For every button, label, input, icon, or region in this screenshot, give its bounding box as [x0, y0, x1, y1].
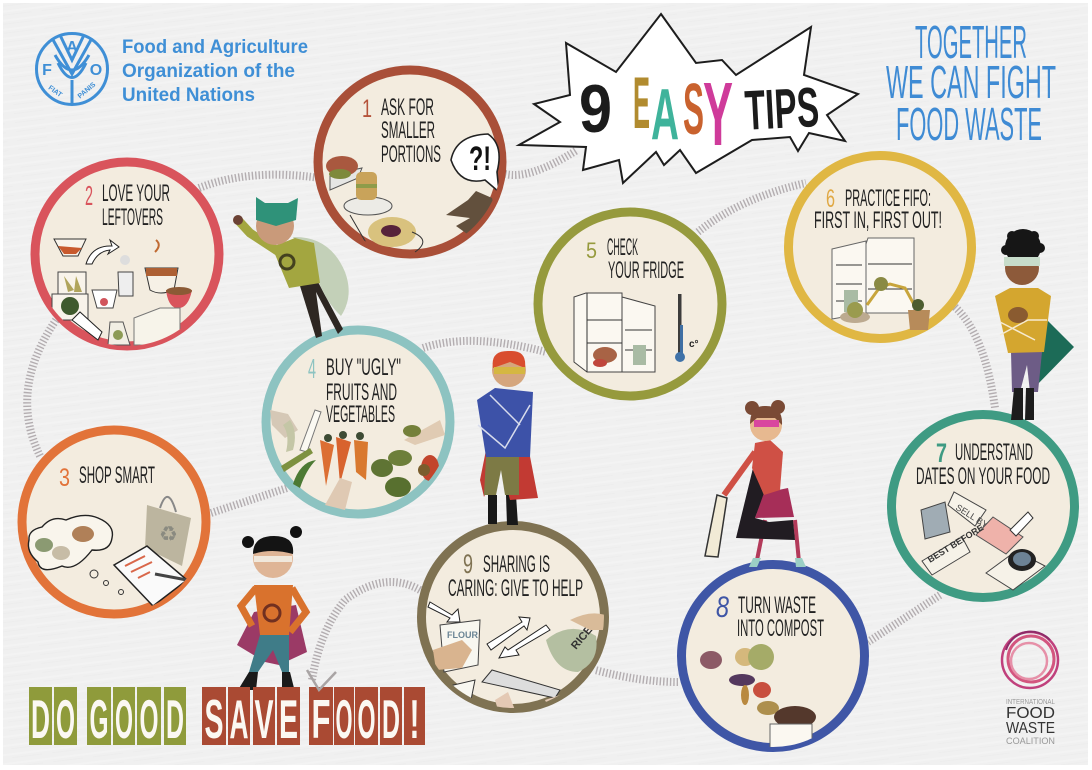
illustration: date labels: SELL BY — [954, 502, 990, 530]
panel: tip 4: FRUITS AND — [326, 379, 397, 406]
panel: tip 3: 3 — [59, 464, 70, 492]
FAO name — [122, 37, 308, 106]
slogan tiles: save food: D — [382, 688, 400, 750]
panel: tip 2: 2 — [85, 180, 93, 211]
panel: tip 3: SHOP SMART — [79, 462, 155, 489]
FAO logo: FIAT — [47, 85, 64, 99]
character: hero in red cape — [477, 351, 538, 525]
title burst — [519, 14, 858, 183]
illustration: date labels — [921, 492, 1045, 590]
slogan tiles: do good: D — [166, 688, 184, 750]
panel: tip 6: PRACTICE FIFO: — [845, 185, 931, 212]
panel: tip 6: FIRST IN, FIRST OUT! — [814, 207, 942, 234]
illustration: open fridge and thermometer — [574, 293, 699, 372]
character: heroine with pink mask — [705, 400, 806, 567]
slogan tiles: save food: E — [279, 688, 298, 750]
arrow head of the route — [307, 670, 336, 690]
FAO logo: F — [42, 62, 52, 79]
logo: International Food Waste Coalition: INTERNATIONAL — [1006, 699, 1055, 706]
panel: tip 1 — [318, 70, 502, 254]
illustration: leftovers — [52, 239, 192, 345]
slogan tiles: save food: O — [358, 688, 376, 750]
FAO logo — [36, 34, 108, 104]
panel: tip 9: 9 — [463, 549, 473, 579]
panel: tip 2 — [35, 162, 219, 346]
FAO name: Organization of the — [122, 61, 295, 82]
panel: tip 7 — [892, 414, 1074, 598]
illustration: open fridge and thermometer: c° — [689, 339, 699, 350]
panel: tip 8 — [682, 564, 864, 750]
FAO name: Food and Agriculture — [122, 37, 308, 58]
panel: tip 9 — [422, 526, 605, 710]
title burst: 9 — [579, 71, 612, 147]
panel: tip 8: 8 — [716, 591, 729, 624]
slogan tiles: save food: A — [230, 688, 248, 750]
logo: International Food Waste Coalition: FOOD — [1006, 705, 1055, 722]
panel: tip 2: LOVE YOUR — [102, 180, 170, 207]
slogan tiles: do good — [29, 687, 186, 750]
logo: International Food Waste Coalition — [1002, 632, 1058, 746]
FAO logo: O — [90, 62, 102, 79]
illustration: flour, rice and arrows: FLOUR — [447, 630, 478, 640]
panel: tip 4: 4 — [308, 353, 316, 384]
illustration: thought bubble, bag and list — [28, 497, 191, 606]
panel: tip 5 — [538, 212, 722, 396]
panel: tip 1: PORTIONS — [381, 141, 441, 168]
panel: tip 2: LEFTOVERS — [102, 204, 163, 231]
character: hero with curly hair — [995, 229, 1074, 420]
title burst: A — [651, 75, 679, 155]
slogan tiles: save food: ! — [410, 688, 420, 750]
logo: International Food Waste Coalition: WASTE — [1006, 720, 1055, 737]
illustration: date labels: BEST BEFORE — [926, 522, 985, 565]
slogan tiles: do good: D — [31, 688, 50, 750]
panel: tip 1: SMALLER — [381, 117, 435, 144]
title burst: TIPS — [743, 75, 821, 142]
panel: tip 8: TURN WASTE — [738, 592, 816, 619]
illustration: flour, rice and arrows: RICE — [569, 624, 595, 652]
illustration: ugly vegetables — [270, 410, 445, 510]
character: hero in green mask — [233, 197, 349, 338]
slogan tiles: do good: O — [140, 688, 158, 750]
slogan tiles: save food: V — [254, 688, 274, 750]
FAO logo: PANIS — [77, 81, 98, 100]
panel: tip 5: CHECK — [607, 234, 638, 261]
FAO logo: A — [66, 39, 78, 56]
illustration: food falling into compost — [700, 644, 816, 750]
panel: tip 6 — [788, 156, 972, 338]
connecting dotted route — [27, 150, 995, 682]
title burst: E — [633, 63, 650, 144]
logo: International Food Waste Coalition: COALITION — [1006, 736, 1055, 746]
illustration: thought bubble, bag and list: ♻ — [159, 523, 178, 546]
slogan tiles: save food — [202, 687, 425, 750]
FAO name: United Nations — [122, 85, 255, 106]
slogan tiles: save food: O — [336, 688, 352, 750]
panel: tip 3 — [22, 430, 206, 614]
panel: tip 9: SHARING IS — [483, 551, 550, 578]
panel: tip 5: YOUR FRIDGE — [608, 257, 684, 284]
panel: tip 1: 1 — [362, 95, 372, 123]
panel: tip 7: 7 — [936, 438, 947, 468]
panel: tip 4: VEGETABLES — [326, 401, 395, 428]
panel: tip 4: BUY "UGLY" — [326, 354, 401, 381]
panel: tip 8: INTO COMPOST — [737, 615, 824, 642]
slogan — [886, 16, 1056, 150]
slogan tiles: do good: O — [115, 688, 133, 750]
slogan tiles: save food: F — [312, 688, 330, 750]
title burst: Y — [703, 65, 733, 165]
character: heroine in orange — [237, 526, 307, 692]
illustration: flour, rice and arrows — [428, 602, 605, 710]
panel: tip 6: 6 — [826, 185, 835, 213]
slogan tiles: do good: G — [90, 688, 108, 750]
illustration: plates and hand: ?! — [469, 140, 491, 178]
slogan tiles: do good: O — [56, 688, 75, 750]
panel: tip 9: CARING: GIVE TO HELP — [448, 575, 583, 602]
panel: tip 5: 5 — [586, 238, 597, 263]
slogan tiles: save food: S — [204, 688, 224, 750]
panel: tip 1: ASK FOR — [381, 94, 434, 121]
title burst: S — [683, 70, 704, 150]
panel: tip 4 — [266, 330, 450, 514]
illustration: fridge with hands and food — [832, 238, 930, 330]
illustration: plates and hand — [326, 134, 499, 253]
